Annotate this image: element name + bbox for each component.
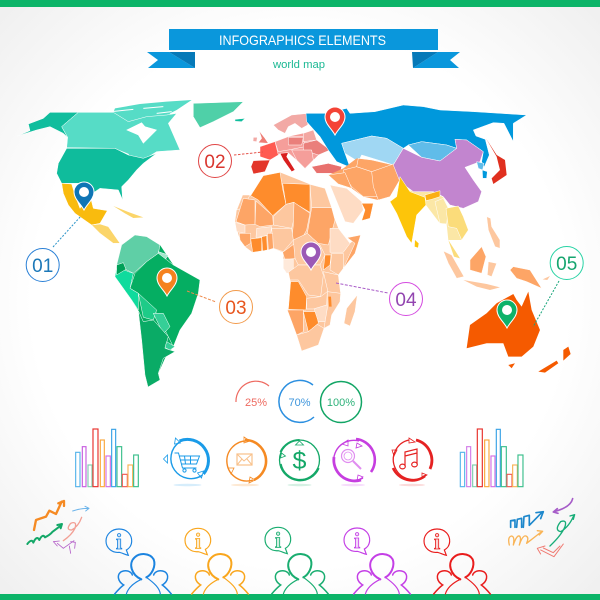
callout 04: 04 [395,290,417,311]
arrow: orange zigzag [34,501,64,530]
arrow: salmon loop [63,517,82,541]
callout 02: 02 [204,152,226,173]
pin: purple [301,242,321,270]
info bubble: i [354,528,360,553]
pin: orange [157,268,177,296]
map: Europe [251,113,342,174]
leader line 05 [533,281,559,327]
icon: envelope ring [227,437,266,486]
arrow: salmon check [537,544,563,557]
person group orange with info bubble [185,528,248,594]
icon: music ring [392,438,432,486]
callout 02 [198,144,232,178]
gauge 25% [236,381,269,409]
trend arrows left [27,501,89,553]
info bubble: i [116,529,122,554]
gauge 100%: 100% [327,397,355,409]
callout 03 [220,290,252,324]
callout 03: 03 [225,298,247,319]
arrow: purple [553,499,573,513]
icon: magnifier ring [334,439,375,486]
gauge 70%: 70% [288,397,311,409]
icon: dollar ring: $ [293,447,307,475]
callout 01 [26,248,59,282]
person group green with info bubble [265,527,328,594]
pin: green [497,300,517,328]
gauge 100% [320,382,362,422]
arrow: blue [73,506,89,511]
callout 01: 01 [32,256,53,277]
map: Americas [17,100,245,387]
map: Africa and Arabia [235,172,373,351]
title text: INFOGRAPHICS ELEMENTS [219,32,386,48]
info bubble: i [275,527,281,552]
pin: blue [74,182,94,210]
gauge 25%: 25% [245,397,267,409]
icon: dollar ring [280,440,320,486]
trend arrows right [509,499,575,557]
arrow: blue steps [511,512,543,527]
leader line 04 [336,283,388,293]
arrow: green squiggle [27,524,62,544]
bar chart left [76,429,138,487]
info bubble: i [434,529,440,554]
leader line 02 [234,152,263,155]
top green bar [0,0,600,7]
subtitle: world map [272,59,325,71]
bar chart right [460,429,523,487]
icon: cart ring [164,438,208,486]
callout 05: 05 [556,254,577,275]
leader line 03 [187,291,216,302]
map: Asia and Oceania [306,105,571,373]
person group purple with info bubble [344,528,410,594]
person group blue with info bubble [106,529,171,594]
arrow: orange coil [509,531,543,545]
world map [17,100,571,387]
info bubble: i [195,528,201,553]
bottom green bar [0,594,600,600]
title ribbon [147,29,460,68]
leader line 01 [53,216,81,247]
callout 04 [390,282,422,316]
pin: red [325,107,345,135]
gauge 70% [279,380,314,422]
arrow: green loop [550,515,575,546]
person group red with info bubble [424,529,490,594]
arrow: purple [53,541,75,553]
callout 05 [550,246,583,280]
